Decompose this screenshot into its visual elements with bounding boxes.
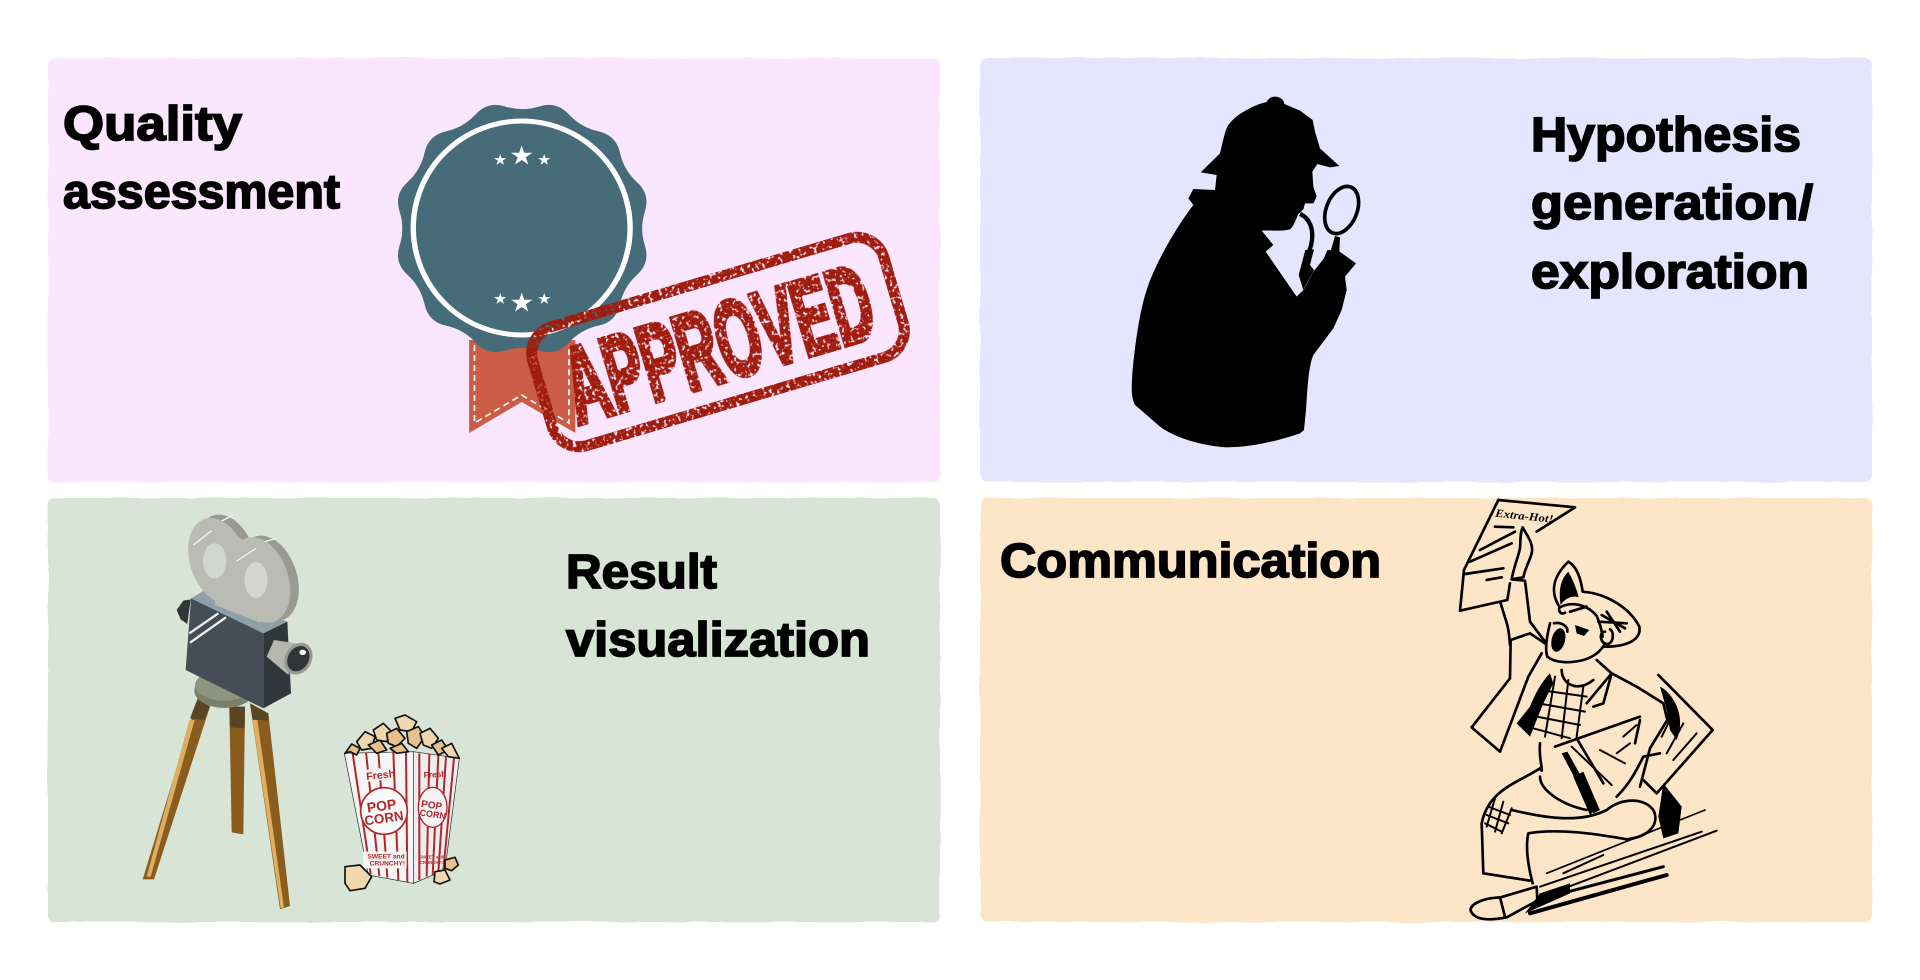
icon: popcorn box: CORN [419, 808, 447, 821]
icon: detective silhouette [1132, 97, 1365, 447]
icon: newsboy shouting with newspaper: Extra-Hot! [1494, 508, 1554, 526]
heading: hypothesis generation/exploration: generation/ [1531, 177, 1813, 230]
panel: hypothesis generation [980, 58, 1872, 482]
heading: hypothesis generation/exploration [1531, 109, 1813, 299]
icon: popcorn box: SWEET and [419, 855, 444, 860]
icon: popcorn box: SWEET and [367, 854, 405, 861]
icon: ribbon tails [469, 340, 575, 433]
icon: popcorn box: POP [366, 796, 397, 816]
icon: popcorn box: Fresh [423, 769, 447, 780]
icon: approved stamp [525, 231, 911, 453]
icon: popcorn box: CORN [363, 808, 404, 828]
panel: quality assessment [48, 58, 940, 482]
heading: quality assessment [63, 98, 340, 219]
heading: result visualization: visualization [566, 614, 870, 667]
icon: newsboy shouting with newspaper [1460, 500, 1717, 919]
panel: communication [980, 498, 1872, 922]
icon: popcorn box: Fresh [366, 768, 396, 783]
icon: popcorn box [344, 715, 459, 891]
heading: hypothesis generation/exploration: exploration [1531, 246, 1809, 299]
icon: popcorn box: CRUNCHY! [420, 860, 443, 865]
icon: rosette badge [398, 105, 647, 352]
heading: hypothesis generation/exploration: Hypothesis [1531, 109, 1801, 162]
heading: result visualization: Result [566, 546, 717, 599]
icon: popcorn box: CRUNCHY! [370, 860, 405, 867]
icon: approved stamp: APPROVED [550, 241, 887, 446]
icon: movie camera on tripod [143, 507, 318, 909]
icon: popcorn box: POP [420, 799, 443, 813]
panel: result visualization [48, 498, 940, 922]
heading: quality assessment: Quality [63, 98, 242, 151]
heading: result visualization [566, 546, 870, 667]
heading: quality assessment: assessment [63, 166, 340, 219]
heading: communication: Communication [1000, 535, 1381, 588]
